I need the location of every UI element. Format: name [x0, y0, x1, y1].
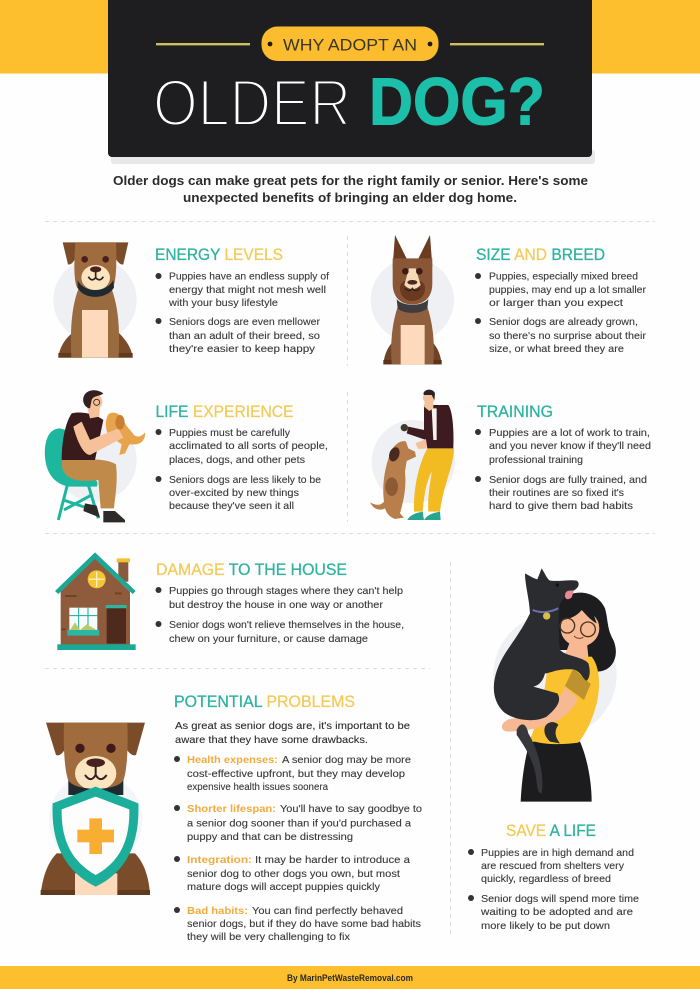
panel: save a life: [468, 568, 639, 932]
intro text: unexpected benefits of bringing an elder dog home.: [183, 191, 517, 205]
bullet list: quickly, regardless of breed: [481, 873, 611, 885]
bullet list: Seniors dogs are even mellower: [169, 316, 321, 328]
bullet list: Senior dogs will spend more time: [481, 893, 639, 905]
heading: potential problems: POTENTIAL PROBLEMS: [174, 693, 355, 711]
title: older: OLDER: [153, 66, 351, 140]
bullet: health expenses: A senior dog may be more: [282, 754, 411, 766]
bullet list: their routines are so fixed it's: [489, 487, 624, 499]
bullet list: acclimated to all sorts of people,: [169, 440, 328, 452]
bullet: integration: mature dogs will accept puppies quickly: [187, 881, 381, 893]
bullet list: chew on your furniture, or cause damage: [169, 633, 368, 645]
footer band: By MarinPetWasteRemoval.com: [287, 973, 413, 983]
bullet list: [475, 270, 647, 355]
icon: brown dog: [53, 242, 137, 358]
intro text: Older dogs can make great pets for the right family or senior. Here's some: [113, 174, 588, 188]
bullet: bad habits: Bad habits:: [187, 905, 248, 917]
bullet list: professional training: [489, 454, 583, 466]
icon: woman hugging black dog: [493, 568, 617, 802]
bullet: health expenses: cost-effective upfront, but they may develop: [187, 768, 405, 780]
bullet list: [156, 427, 328, 512]
title panel: [108, 0, 592, 157]
bullet list: are rescued from shelters very: [481, 860, 625, 872]
bullet list: [475, 427, 651, 512]
bullet: bad habits: they will be very challenging to fix: [187, 931, 351, 943]
intro paragraph: As great as senior dogs are, it's important to be: [175, 720, 410, 732]
bottom shadow of title panel: [111, 150, 595, 164]
bullet list: [156, 270, 329, 355]
bullet list: more likely to be put down: [481, 920, 610, 932]
bullet: bad habits: You can find perfectly behaved: [252, 905, 403, 917]
bullet list: places, dogs, and other pets: [169, 454, 305, 466]
heading: life experience: LIFE EXPERIENCE: [156, 403, 294, 421]
icon: man on chair holding puppy: [45, 390, 145, 522]
bullet: shorter lifespan: a senior dog sooner than if you'd purchased a: [187, 818, 411, 830]
bullet: shorter lifespan: puppy and that can be distressing: [187, 831, 353, 843]
icon: pointy eared dog: [371, 235, 454, 364]
panel: potential problems: [41, 693, 422, 943]
bullet: integration: Integration:: [187, 854, 252, 866]
bullet list: Senior dogs won't relieve themselves in the house,: [169, 619, 404, 631]
bullet: integration: It may be harder to introduce a: [255, 854, 410, 866]
panel: size and breed: [371, 235, 647, 364]
bullet list: and you never know if they'll need: [489, 440, 651, 452]
bullet list: Puppies are in high demand and: [481, 847, 634, 859]
heading: size and breed: SIZE AND BREED: [476, 246, 605, 264]
bullet list: Senior dogs are fully trained, and: [489, 474, 647, 486]
intro paragraph: [175, 720, 410, 746]
bullet list: over-excited by new things: [169, 487, 299, 499]
bullet list: but destroy the house in one way or another: [169, 599, 384, 611]
heading: damage to the house: DAMAGE TO THE HOUSE: [156, 561, 347, 579]
bullet list: they're easier to keep happy: [169, 343, 316, 355]
panel: training: [370, 390, 651, 520]
bullet: health expenses: [174, 754, 411, 793]
panel: damage to the house: [55, 552, 404, 650]
bullet list: Puppies, especially mixed breed: [489, 270, 638, 282]
bullet: health expenses: Health expenses:: [187, 754, 278, 766]
bullet list: because they've seen it all: [169, 500, 294, 512]
bullet: integration: senior dog to other dogs you own, but most: [187, 868, 400, 880]
icon: house: [55, 552, 136, 650]
icon: man training dog: [370, 390, 455, 520]
heading: save a life: SAVE A LIFE: [506, 822, 596, 840]
bullet list: Seniors dogs are less likely to be: [169, 474, 321, 486]
bullet list: size, or what breed they are: [489, 343, 624, 355]
bullet list: with your busy lifestyle: [168, 297, 278, 309]
icon: dog with shield: [41, 723, 150, 895]
heading: training: TRAINING: [477, 403, 553, 421]
bullet list: [156, 585, 404, 645]
pill: why adopt an: WHY ADOPT AN: [283, 36, 417, 54]
bullet: integration: [174, 854, 410, 893]
intro paragraph: aware that they have some drawbacks.: [175, 734, 368, 746]
heading: energy levels: ENERGY LEVELS: [155, 246, 283, 264]
bullet list: [468, 847, 639, 932]
title: dog: DOG?: [369, 64, 545, 140]
bullet list: hard to give them bad habits: [489, 500, 633, 512]
bullet: bad habits: senior dogs, but if they do have some bad habits: [187, 918, 421, 930]
bullet list: Puppies are a lot of work to train,: [489, 427, 650, 439]
bullet list: puppies, may end up a lot smaller: [489, 284, 646, 296]
bullet list: Senior dogs are already grown,: [489, 316, 638, 328]
bullet list: energy that might not mesh well: [169, 284, 326, 296]
panel: energy levels: [53, 242, 329, 358]
bullet list: waiting to be adopted and are: [480, 906, 633, 918]
bullet list: than an adult of their breed, so: [169, 330, 320, 342]
bullet: shorter lifespan: [174, 803, 422, 843]
top yellow band: [0, 0, 700, 74]
intro text: [113, 174, 588, 205]
bullet list: Puppies must be carefully: [169, 427, 291, 439]
icon: shield with cross: [52, 787, 138, 887]
footer band: [0, 966, 700, 989]
bullet list: Puppies go through stages where they can't help: [169, 585, 403, 597]
pill: why adopt an: [262, 26, 438, 61]
bullet: shorter lifespan: Shorter lifespan:: [187, 803, 276, 815]
bullet: health expenses: expensive health issues soonera: [187, 781, 328, 793]
panel: life experience: [45, 390, 328, 522]
bullet list: Puppies have an endless supply of: [169, 270, 329, 282]
bullet: shorter lifespan: You'll have to say goodbye to: [280, 803, 422, 815]
bullet list: so there's no surprise about their: [489, 330, 647, 342]
bullet list: or larger than you expect: [489, 297, 623, 309]
bullet: bad habits: [174, 905, 421, 943]
